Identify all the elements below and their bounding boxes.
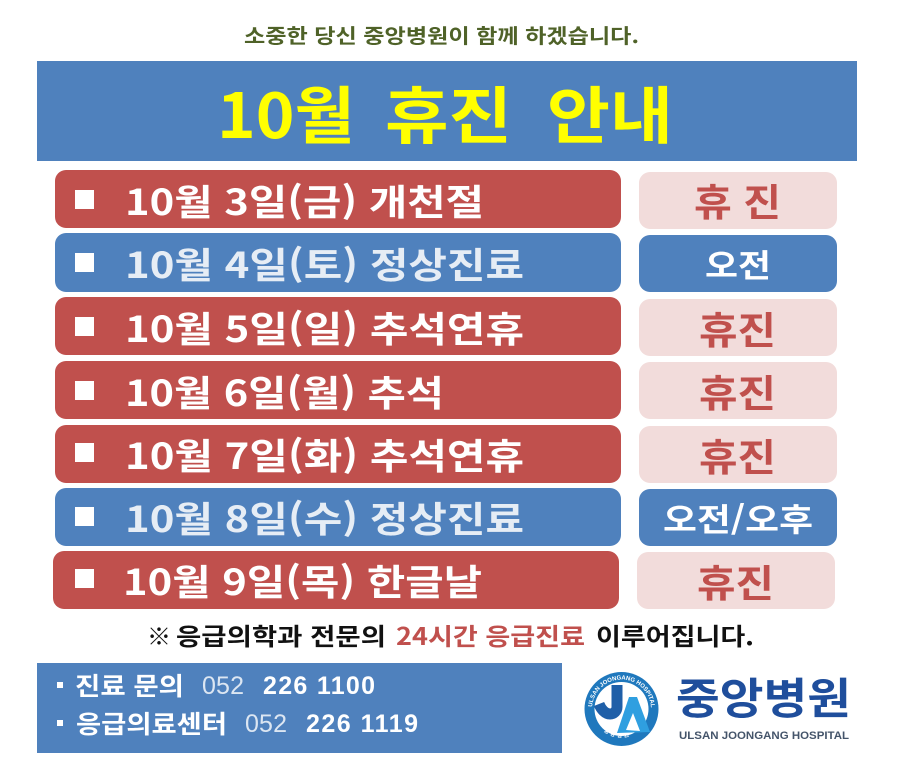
contact panel: 052 (245, 710, 287, 738)
row: 10월 4일 (55, 233, 621, 292)
status: 휴진 10월 3일 (639, 172, 837, 229)
status: 휴진 10월 5일 (639, 299, 837, 356)
row: 10월 9일: 10월 9일(목) 한글날 (123, 554, 482, 606)
emergency notice (147, 617, 754, 652)
icon: JA emblem: ULSAN JOONGANG HOSPITAL (588, 675, 655, 708)
contact panel: 진료 문의 (75, 667, 184, 703)
row: 10월 5일: 10월 5일(일) 추석연휴 (125, 301, 524, 353)
emergency notice: 24시간 응급진료 (396, 617, 585, 652)
row: 10월 3일 (55, 170, 621, 228)
title banner: 10월 (217, 66, 355, 156)
logo english name: ULSAN JOONGANG HOSPITAL (679, 730, 849, 742)
row: 10월 7일 (55, 425, 621, 483)
status: 휴진 10월 7일: 휴진 (699, 427, 776, 482)
status: 휴진 10월 9일 (637, 552, 835, 609)
contact panel: 226 1100 (263, 672, 375, 700)
row: 10월 8일: 10월 8일(수) 정상진료 (125, 491, 524, 543)
row: 10월 8일 (55, 488, 621, 546)
status: 휴진 10월 6일: 휴진 (699, 363, 776, 418)
row: 10월 7일: 10월 7일(화) 추석연휴 (125, 428, 524, 480)
emergency notice: 이루어집니다. (596, 617, 754, 652)
title banner: 휴진 (385, 66, 512, 156)
hospital logo (584, 665, 851, 746)
contact panel: 응급의료센터 (76, 705, 227, 741)
status: 휴진 10월 3일: 휴 진 (694, 172, 781, 227)
status: 휴진 10월 5일: 휴진 (699, 300, 776, 355)
status: 오전/오후 (639, 489, 837, 546)
icon: JA emblem: 중 앙 병 원 (604, 730, 629, 738)
row: 10월 6일 (55, 361, 621, 419)
status: 휴진 10월 7일 (639, 426, 837, 483)
title banner: 안내 (547, 66, 673, 156)
contact panel: 226 1119 (306, 710, 418, 738)
logo wordmark: 중앙병원 (676, 665, 851, 727)
status: 오전/오후: 오전/오후 (663, 495, 813, 541)
row: 10월 3일: 10월 3일(금) 개천절 (125, 174, 484, 226)
emergency notice: ※ (147, 617, 171, 652)
icon: JA emblem (584, 672, 658, 746)
status: 오전 (639, 235, 837, 292)
status: 휴진 10월 9일: 휴진 (697, 553, 774, 608)
row: 10월 4일: 10월 4일(토) 정상진료 (125, 237, 524, 289)
title banner (37, 61, 857, 161)
status: 오전: 오전 (705, 241, 771, 287)
contact panel (37, 663, 562, 753)
row: 10월 9일 (53, 551, 619, 609)
row: 10월 5일 (55, 297, 621, 355)
emergency notice: 응급의학과 전문의 (176, 617, 386, 652)
row: 10월 6일: 10월 6일(월) 추석 (125, 365, 444, 417)
contact panel: 052 (202, 672, 244, 700)
tagline: 소중한 당신 중앙병원이 함께 하겠습니다. (244, 20, 639, 49)
status: 휴진 10월 6일 (639, 362, 837, 419)
